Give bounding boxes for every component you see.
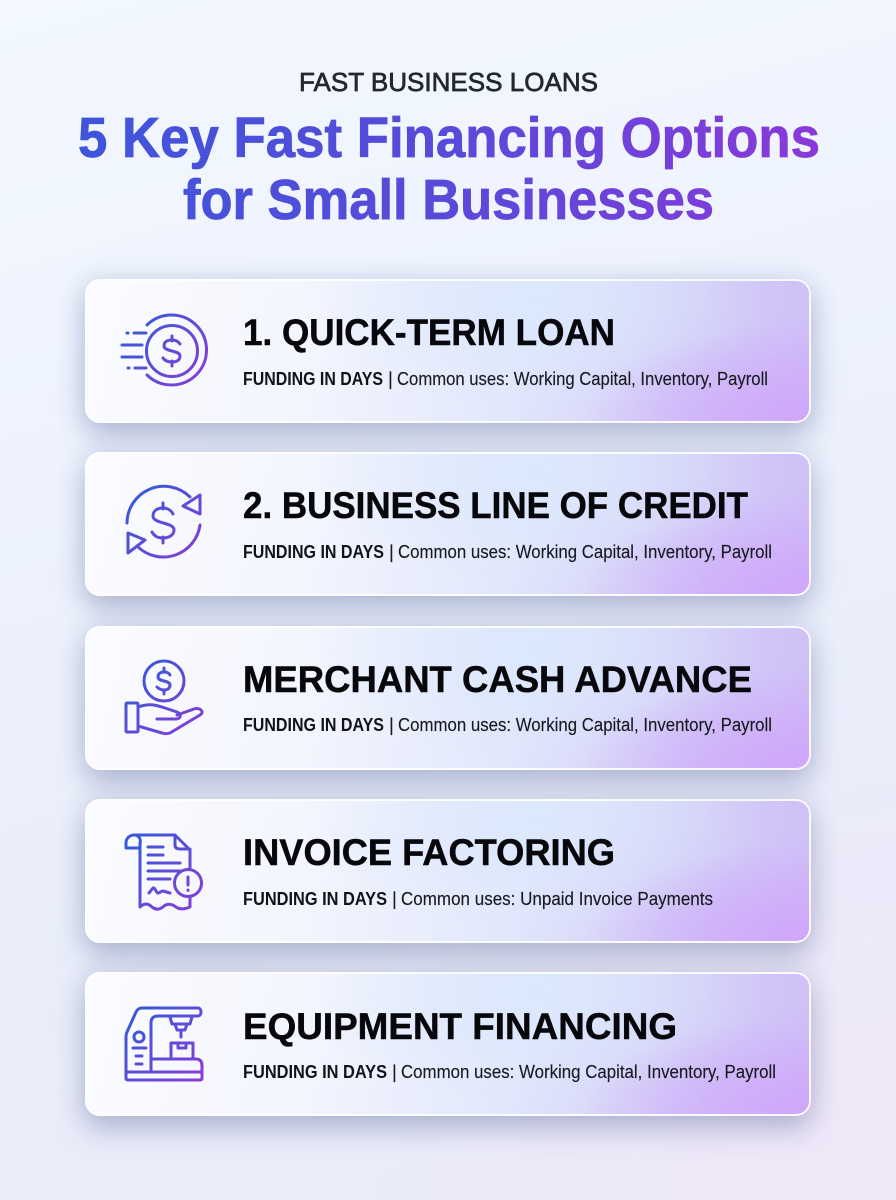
funding details: FUNDING IN DAYS bbox=[243, 1061, 387, 1082]
icon: circular dollar arrows bbox=[127, 486, 200, 557]
funding details: Common uses: Working Capital, Inventory, Payroll bbox=[401, 1061, 776, 1082]
icon: fast dollar coin bbox=[122, 315, 206, 385]
funding details bbox=[243, 368, 768, 389]
card 1: quick-term loan bbox=[85, 279, 811, 423]
funding details bbox=[243, 888, 713, 909]
funding details: FUNDING IN DAYS bbox=[243, 714, 384, 735]
funding details: | bbox=[389, 541, 394, 562]
card 5: equipment financing bbox=[85, 972, 811, 1116]
icon: invoice with alert bbox=[126, 835, 202, 909]
funding details: FUNDING IN DAYS bbox=[243, 888, 387, 909]
funding details: | bbox=[388, 368, 393, 389]
funding details: | bbox=[392, 1061, 397, 1082]
eyebrow heading: FAST BUSINESS LOANS bbox=[299, 67, 598, 97]
funding details: | bbox=[392, 888, 397, 909]
funding details: FUNDING IN DAYS bbox=[243, 541, 384, 562]
funding details: | bbox=[389, 714, 394, 735]
funding details bbox=[243, 541, 772, 562]
icon: CNC machine bbox=[126, 1008, 202, 1080]
funding details: Common uses: Working Capital, Inventory, Payroll bbox=[398, 714, 772, 735]
funding details: Common uses: Working Capital, Inventory, Payroll bbox=[397, 368, 768, 389]
funding details bbox=[243, 714, 772, 735]
title: for Small Businesses bbox=[183, 168, 714, 232]
funding details bbox=[243, 1061, 776, 1082]
card title: INVOICE FACTORING bbox=[243, 831, 615, 873]
header bbox=[78, 67, 820, 232]
card 4: invoice factoring bbox=[85, 799, 811, 943]
card title: 1. QUICK-TERM LOAN bbox=[243, 311, 615, 353]
card 3: merchant cash advance bbox=[85, 626, 811, 770]
card title: EQUIPMENT FINANCING bbox=[243, 1005, 677, 1047]
funding details: Common uses: Unpaid Invoice Payments bbox=[401, 888, 713, 909]
funding details: FUNDING IN DAYS bbox=[243, 368, 383, 389]
card 2: business line of credit bbox=[85, 452, 811, 596]
card title: 2. BUSINESS LINE OF CREDIT bbox=[243, 484, 748, 526]
card title: MERCHANT CASH ADVANCE bbox=[243, 658, 752, 700]
title bbox=[78, 106, 820, 232]
funding details: Common uses: Working Capital, Inventory, Payroll bbox=[398, 541, 772, 562]
title: 5 Key Fast Financing Options bbox=[78, 106, 820, 170]
icon: hand holding coin bbox=[126, 661, 202, 734]
